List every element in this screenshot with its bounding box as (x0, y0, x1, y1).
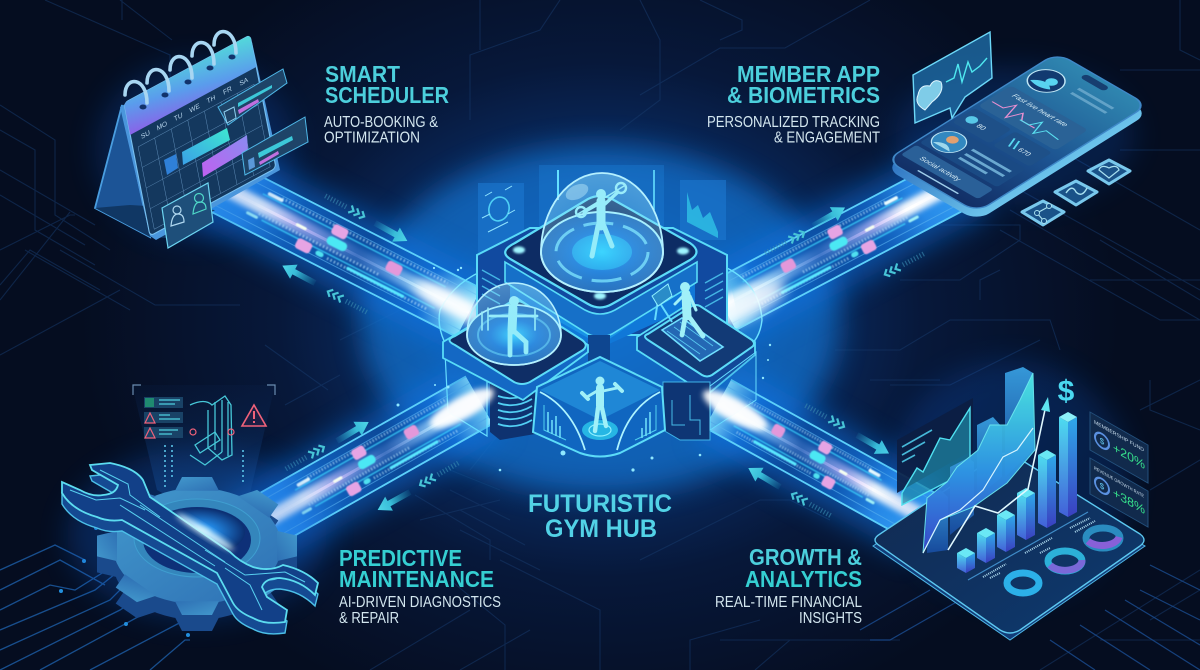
arrows and chevrons: scheduler link (279, 192, 411, 316)
title: predictive maintenance: AI-DRIVEN DIAGNOSTICS (339, 594, 501, 611)
weekday labels: WE (189, 103, 201, 115)
calendar rings (125, 32, 236, 110)
donut charts (1007, 528, 1120, 593)
glowing strip under top deck (560, 308, 634, 342)
hot beam mouths upper (409, 273, 791, 335)
deck lights (513, 246, 689, 300)
hot beam mouths front (425, 381, 772, 437)
rear shelf (477, 228, 727, 335)
icon: member app phone: Fast live heart rate (1010, 93, 1070, 128)
title: member app and biometrics: & BIOMETRICS (727, 82, 880, 108)
metric card two (1090, 458, 1148, 527)
title: predictive maintenance: MAINTENANCE (339, 566, 494, 592)
shelf side details (482, 270, 723, 307)
main area chart (923, 373, 1035, 553)
title: member app and biometrics: & ENGAGEMENT (774, 130, 880, 146)
teal area chart (902, 408, 970, 505)
icon: member app phone: 670 (1015, 147, 1034, 157)
title: smart scheduler: SMART (325, 61, 400, 87)
heart bubble (913, 32, 992, 123)
labels on platform (983, 518, 1095, 578)
central pillar (588, 335, 610, 375)
metric card one: $ (1100, 435, 1104, 447)
title: predictive maintenance: & REPAIR (339, 610, 399, 627)
weekday labels: SA (239, 77, 249, 88)
title: futuristic gym hub (528, 490, 672, 543)
growth arrow (948, 397, 1050, 550)
back columns (927, 367, 1033, 553)
schedule card lower (242, 117, 308, 175)
title: growth and analytics: REAL-TIME FINANCIAL (715, 594, 862, 611)
weekday labels: FR (223, 86, 232, 97)
metric card one: MEMBERSHIP FUND (1094, 420, 1144, 454)
gear top (97, 477, 297, 615)
platform base (873, 462, 1145, 640)
gym machine wireframe (190, 396, 232, 465)
wrench top (62, 463, 318, 623)
app tile: dna (1055, 181, 1097, 205)
backdrop panels (478, 165, 726, 260)
gear depth (97, 493, 297, 631)
action bar (901, 145, 993, 199)
gear hole (134, 499, 260, 577)
title: growth and analytics (715, 544, 862, 627)
figure: lifter (576, 183, 626, 256)
title: futuristic gym hub: GYM HUB (545, 515, 657, 543)
warning triangle (242, 405, 266, 426)
calendar page (124, 35, 276, 236)
central hub (396, 165, 791, 472)
event bars (164, 154, 178, 175)
title: growth and analytics: INSIGHTS (799, 610, 862, 627)
wrench flare (174, 511, 236, 553)
platform top (875, 453, 1144, 633)
title: smart scheduler: AUTO-BOOKING & (324, 114, 439, 131)
trend line (923, 428, 1033, 553)
metric card two: +38% (1113, 485, 1145, 517)
stat cards (952, 108, 1011, 143)
title: growth and analytics: ANALYTICS (745, 566, 862, 592)
beam: phone to hub (700, 139, 990, 345)
metric card two: REVENUE GROWTH RATE (1094, 466, 1145, 500)
circuit traces lower left (0, 526, 190, 670)
left deck with dome (443, 283, 588, 440)
hologram cone (132, 385, 275, 537)
hologram content (133, 385, 275, 490)
title: smart scheduler (324, 61, 449, 146)
icon: growth analytics dashboard (873, 360, 1148, 640)
beam: maintenance to hub (221, 362, 503, 571)
metric card one: +20% (1113, 440, 1145, 472)
front glass bay (533, 357, 665, 456)
figure: runner (675, 282, 703, 336)
status rows (144, 397, 183, 408)
title: smart scheduler: SCHEDULER (325, 82, 449, 108)
title: member app and biometrics: MEMBER APP (737, 61, 880, 87)
title: smart scheduler: OPTIMIZATION (324, 130, 420, 146)
circuit traces lower right (860, 565, 1200, 670)
title: member app and biometrics: PERSONALIZED TRACKING (707, 114, 880, 131)
icon: smart scheduler calendar (95, 32, 308, 248)
right deck with treadmill (637, 282, 756, 440)
wrench circuits (70, 470, 305, 610)
metric card two: $ (1100, 480, 1104, 492)
top deck side (505, 262, 697, 337)
arrows and chevrons: maintenance link (284, 415, 460, 517)
arrows and chevrons: analytics link (744, 402, 893, 519)
icon: member app phone (885, 32, 1149, 225)
pillar under top deck (510, 270, 695, 348)
profile card (920, 124, 1026, 187)
weekday labels: MO (156, 120, 168, 133)
top dome with barbell figure (541, 173, 663, 292)
title: predictive maintenance (339, 545, 501, 627)
figure: cable exercise (482, 296, 537, 355)
app tile: heart (1088, 160, 1130, 184)
top deck (505, 196, 696, 308)
weekday labels: TU (174, 112, 183, 123)
arrows and chevrons: member app link (763, 201, 926, 278)
phone top avatar (1019, 65, 1073, 97)
icon: member app phone: 80 (974, 123, 989, 131)
calendar stand (95, 105, 150, 237)
panel text lines (902, 430, 932, 462)
heart-rate card (978, 85, 1088, 150)
weekday labels: SU (141, 130, 151, 141)
treadmill (652, 284, 723, 361)
weekday labels (141, 77, 249, 141)
app tile: share (1022, 201, 1064, 225)
central glow (360, 145, 840, 495)
calendar back page (120, 38, 280, 240)
icon: predictive maintenance gear and wrench (62, 385, 327, 634)
dollar sign: $ (1058, 375, 1075, 408)
metric card one (1090, 412, 1148, 483)
member card (162, 183, 213, 248)
beam: analytics to hub (695, 365, 949, 557)
phone body (885, 60, 1149, 221)
sparkles (396, 267, 771, 472)
title: growth and analytics: GROWTH & (749, 544, 862, 570)
growth bars (957, 412, 1077, 573)
title: member app and biometrics (707, 61, 880, 146)
weekday labels: TH (206, 94, 216, 106)
data streams (165, 445, 243, 490)
schedule card upper (218, 69, 287, 125)
rear glass domes (439, 268, 762, 352)
dark chart panel (897, 398, 973, 493)
wrench depth (62, 474, 318, 634)
beam: calendar to hub (167, 131, 492, 352)
platform divider (968, 512, 1088, 580)
title: predictive maintenance: PREDICTIVE (339, 545, 462, 571)
figure: dumbbells (582, 376, 622, 431)
notch (1080, 74, 1110, 91)
icon: member app phone: Social activity (917, 155, 964, 182)
title: futuristic gym hub: FUTURISTIC (528, 490, 672, 518)
